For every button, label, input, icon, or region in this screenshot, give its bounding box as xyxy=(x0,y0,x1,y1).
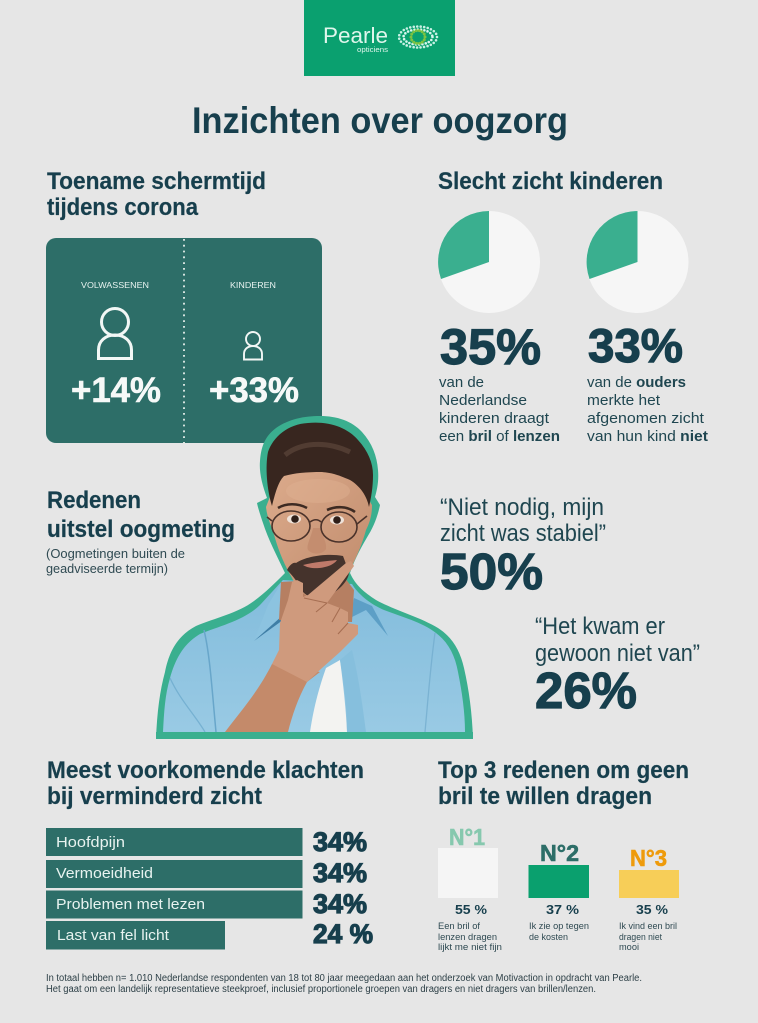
silhouette outline xyxy=(156,416,473,739)
top 3: nummer 3: 35 % xyxy=(636,902,668,917)
bar chart: klachten xyxy=(46,827,373,950)
footnote: Het gaat om een landelijk representatieve steekproef, inclusief proportionele groepen van dragers en niet dragers van brillen/lenzen. xyxy=(46,984,596,995)
pie chart: 33% xyxy=(586,211,688,313)
stat: 35% kinderen: Nederlandse xyxy=(439,392,527,409)
logo: Pearle opticiens xyxy=(304,0,455,76)
white tee xyxy=(310,660,347,732)
bar chart: klachten: 34% xyxy=(313,827,367,857)
top 3: nummer 3: Ik vind een bril xyxy=(619,921,677,932)
shirt xyxy=(163,580,465,732)
photo: man with glasses, hand on chin xyxy=(156,416,473,739)
forearm xyxy=(225,664,320,732)
heading: meest voorkomende klachten: Meest voorkomende klachten xyxy=(47,757,364,784)
bar chart: klachten: 34% xyxy=(313,889,367,919)
heading: redenen uitstel oogmeting xyxy=(46,487,235,576)
title: Inzichten over oogzorg xyxy=(192,100,568,141)
bar chart: klachten: Last van fel licht xyxy=(57,927,170,944)
stat: 35% kinderen: 35% xyxy=(440,319,541,375)
quote: kwam er niet van 26%: 26% xyxy=(535,662,637,719)
stat: 33% ouders: 33% xyxy=(588,319,683,372)
stat: 33% ouders: merkte het xyxy=(587,392,661,409)
panel: schermtijd volwassenen en kinderen xyxy=(46,238,322,443)
top 3: nummer 3: dragen niet xyxy=(619,932,662,943)
face xyxy=(266,470,372,598)
quote: niet nodig 50%: “Niet nodig, mijn xyxy=(440,494,604,521)
top 3: nummer 2: de kosten xyxy=(529,932,568,943)
logo: Pearle opticiens: opticiens xyxy=(357,45,388,54)
heading: redenen uitstel oogmeting: Redenen xyxy=(47,487,141,514)
stat: 33% ouders: van de ouders xyxy=(587,374,686,391)
top 3: nummer 3: mooi xyxy=(619,942,639,953)
footnote: In totaal hebben n= 1.010 Nederlandse respondenten van 18 tot 80 jaar meegedaan aan het onderzoek van Motivaction in opdracht van Pearle. xyxy=(46,973,642,984)
quote: kwam er niet van 26% xyxy=(535,613,700,719)
quote: kwam er niet van 26%: “Het kwam er xyxy=(535,613,665,640)
base stroke xyxy=(156,732,473,739)
neck xyxy=(279,578,354,622)
nose xyxy=(308,528,326,554)
footnote xyxy=(46,973,642,995)
heading: toename schermtijd: Toename schermtijd xyxy=(47,168,266,195)
hand with thumb and index finger xyxy=(272,561,358,682)
stat: 33% ouders: afgenomen zicht xyxy=(587,410,705,427)
panel: schermtijd volwassenen en kinderen: +14% xyxy=(71,371,161,410)
stat: 33% ouders: van hun kind niet xyxy=(587,428,708,445)
panel: schermtijd volwassenen en kinderen: VOLWASSENEN xyxy=(81,280,149,290)
logo: Pearle opticiens: Pearle xyxy=(323,23,388,48)
bar chart: klachten: Problemen met lezen xyxy=(56,896,205,913)
heading: meest voorkomende klachten: bij verminderd zicht xyxy=(47,783,262,810)
heading: meest voorkomende klachten xyxy=(47,757,364,810)
top 3: nummer 3: N°3 xyxy=(630,845,667,871)
bar chart: klachten: 34% xyxy=(313,858,367,888)
icon: child person xyxy=(244,332,262,360)
top 3: nummer 1 xyxy=(438,824,502,953)
stat: 35% kinderen: een bril of lenzen xyxy=(439,428,560,445)
top 3: nummer 2: N°2 xyxy=(540,840,579,866)
heading: slecht zicht kinderen: Slecht zicht kinderen xyxy=(438,168,663,195)
top 3: nummer 1: lenzen dragen xyxy=(438,932,497,943)
quote: kwam er niet van 26%: gewoon niet van” xyxy=(535,640,700,667)
top 3: nummer 1: N°1 xyxy=(449,824,485,850)
top 3: nummer 1: Een bril of xyxy=(438,921,480,932)
quote: niet nodig 50%: 50% xyxy=(440,543,543,600)
heading: redenen uitstel oogmeting: geadviseerde termijn) xyxy=(46,562,168,576)
stat: 33% ouders xyxy=(587,319,708,445)
quote: niet nodig 50%: zicht was stabiel” xyxy=(440,520,606,547)
shirt collars xyxy=(254,580,283,641)
top 3: nummer 2: 37 % xyxy=(546,902,579,917)
top 3: nummer 3 xyxy=(619,845,679,953)
top 3: nummer 1: lijkt me niet fijn xyxy=(438,942,502,953)
bar chart: klachten: Hoofdpijn xyxy=(56,834,125,851)
panel: schermtijd volwassenen en kinderen: +33% xyxy=(209,371,299,410)
top 3: nummer 1: 55 % xyxy=(455,902,487,917)
icon: adult person xyxy=(98,308,132,358)
heading: redenen uitstel oogmeting: uitstel oogmeting xyxy=(47,516,235,543)
quote: niet nodig 50% xyxy=(440,494,606,600)
stat: 35% kinderen xyxy=(439,319,560,445)
bar chart: klachten: Vermoeidheid xyxy=(56,865,153,882)
eyebrows xyxy=(278,504,307,508)
lips xyxy=(303,560,337,568)
heading: toename schermtijd xyxy=(47,168,266,221)
heading: toename schermtijd: tijdens corona xyxy=(47,194,199,221)
stat: 35% kinderen: van de xyxy=(439,374,484,391)
forehead highlight xyxy=(286,479,350,503)
pie chart: 35% xyxy=(438,211,540,313)
heading: top 3 redenen: bril te willen dragen xyxy=(438,783,652,810)
stat: 35% kinderen: kinderen draagt xyxy=(439,410,550,427)
heading: top 3 redenen: Top 3 redenen om geen xyxy=(438,757,689,784)
eyes xyxy=(287,514,301,524)
panel: schermtijd volwassenen en kinderen: KINDEREN xyxy=(230,280,276,290)
glasses xyxy=(267,511,367,542)
top 3: nummer 2: Ik zie op tegen xyxy=(529,921,589,932)
top 3: nummer 2 xyxy=(528,840,589,943)
bar chart: klachten: 24 % xyxy=(313,919,373,949)
heading: top 3 redenen xyxy=(438,757,689,810)
shirt placket shade xyxy=(340,650,366,732)
heading: redenen uitstel oogmeting: (Oogmetingen buiten de xyxy=(46,547,185,561)
beard xyxy=(287,555,349,598)
hair xyxy=(267,423,373,507)
